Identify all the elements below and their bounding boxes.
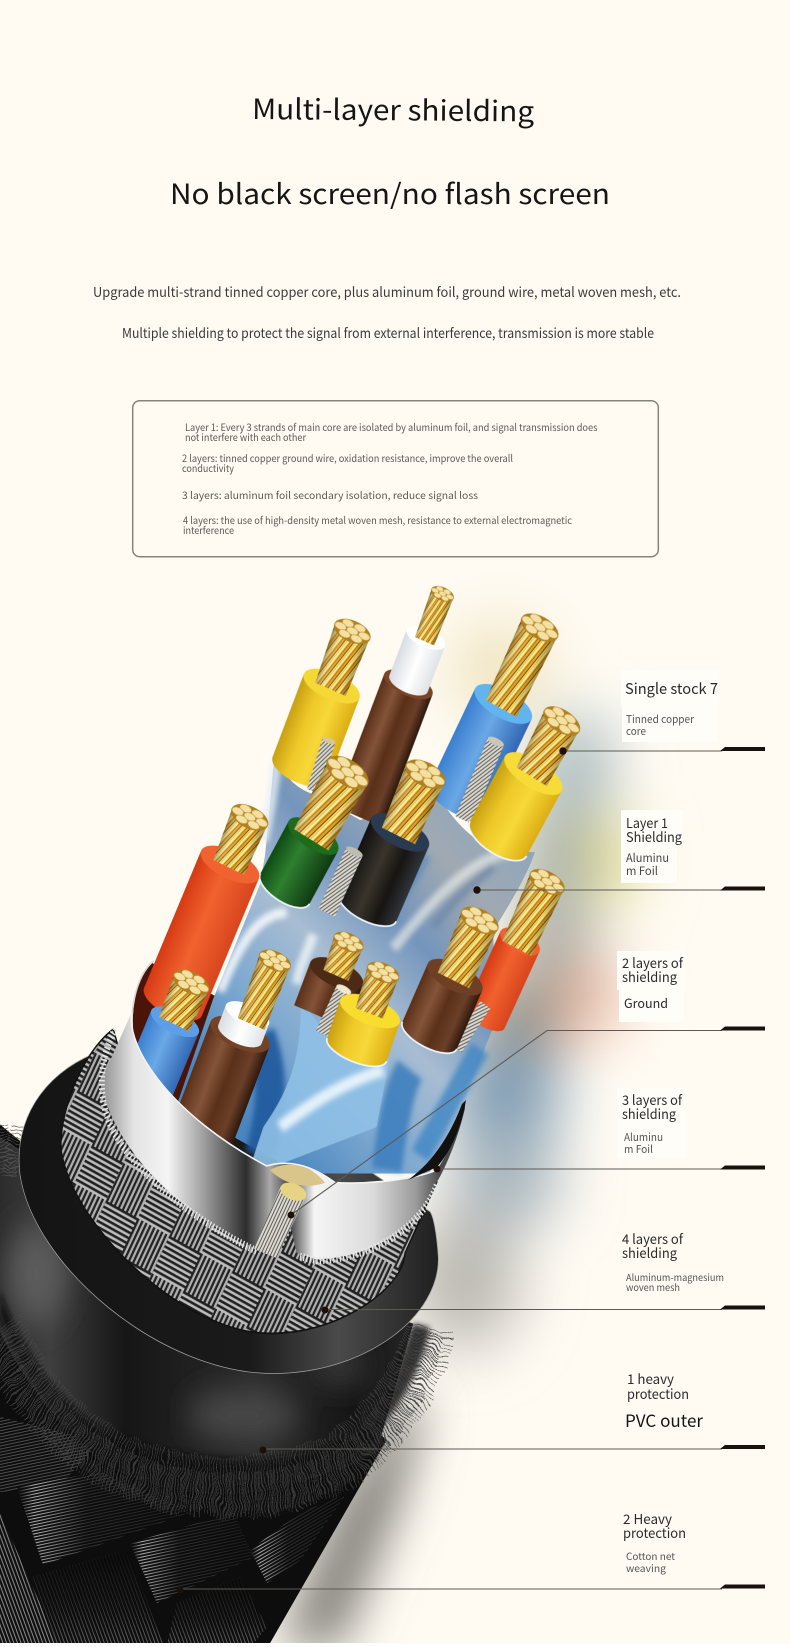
drain strand: back right [455, 735, 505, 824]
panel: layer descriptions: conductivity [182, 460, 235, 475]
base dark fill [0, 1124, 387, 1647]
foil highlights [220, 763, 513, 1170]
wire: brown small [294, 922, 378, 1028]
label: 2 heavy protection: protection [623, 1522, 686, 1542]
intro line 1: Upgrade multi-strand tinned copper core, plus aluminum foil, ground wire, metal woven mesh, etc. [93, 281, 681, 301]
label: 2 layers of shielding: 2 layers of [622, 952, 684, 972]
aluminium foil band [100, 1012, 465, 1259]
label: single stock 7: Single stock 7 [625, 678, 718, 699]
label: 1 heavy protection [625, 1368, 703, 1432]
wire: yellow front right [463, 694, 595, 870]
callout end bars [720, 747, 765, 1588]
panel: layer descriptions: 3 layers: aluminum foil secondary isolation, reduce signal loss [182, 487, 478, 502]
label: 2 heavy protection: Cotton net [626, 1548, 675, 1563]
panel: layer descriptions [133, 401, 658, 557]
woven metal braid [61, 1029, 437, 1333]
opening rim [132, 961, 153, 1049]
label: 1 heavy protection: protection [627, 1383, 689, 1403]
cable edge shadow [280, 1400, 425, 1647]
wire: blue low [119, 961, 219, 1111]
label: single stock 7: core [626, 724, 646, 739]
wire: green [254, 746, 378, 916]
label: 4 layers of shielding: Aluminum-magnesium [626, 1270, 724, 1284]
subtitle: No black screen/no flash screen [170, 173, 610, 213]
label: single stock 7: Tinned copper [626, 712, 695, 727]
drain strand: right group [452, 1001, 490, 1052]
label: layer 1 shielding: m Foil [626, 863, 658, 879]
label: 2 heavy protection: 2 Heavy [623, 1508, 672, 1528]
image bottom strip [0, 1643, 790, 1647]
label: layer 1 shielding: Shielding [626, 826, 682, 846]
panel: layer descriptions: not interfere with each other [185, 429, 306, 444]
wire: yellow small [323, 952, 416, 1073]
fibre fringe [0, 1124, 430, 1494]
label: 4 layers of shielding: 4 layers of [622, 1228, 684, 1248]
gold glint at notch [270, 1165, 325, 1186]
label: 2 layers of shielding [622, 952, 684, 1012]
wire: black [333, 749, 459, 934]
label: 2 layers of shielding: Ground [624, 993, 668, 1012]
intro line 2: Multiple shielding to protect the signal from external interference, transmission is more stable [122, 322, 654, 342]
sheath sheen [7, 1224, 370, 1440]
label: 4 layers of shielding: woven mesh [626, 1280, 680, 1294]
wire: red right [462, 862, 571, 1036]
label: 2 heavy protection: weaving [626, 1560, 666, 1575]
band serrated edge [102, 1029, 437, 1261]
drain strand: small group [316, 982, 352, 1038]
drain strand: back left [307, 736, 336, 794]
panel: layer descriptions: 4 layers: the use of high-density metal woven mesh, resistance to external electromagnetic [183, 512, 572, 527]
wire: red left [139, 793, 283, 1028]
cotton net weave [0, 1417, 345, 1644]
background glow behind cable [410, 620, 638, 1350]
label: 4 layers of shielding [622, 1228, 724, 1294]
label: 1 heavy protection: PVC outer [625, 1407, 703, 1432]
label: 1 heavy protection: 1 heavy [627, 1368, 674, 1388]
dark gap between foil and band [408, 1100, 466, 1180]
wire: blue back right [424, 602, 573, 827]
label: 3 layers of shielding: m Foil [624, 1142, 653, 1157]
label: 2 heavy protection [623, 1508, 686, 1575]
callout leader lines [180, 751, 722, 1589]
label: 3 layers of shielding: 3 layers of [622, 1089, 683, 1109]
ground drain wire [254, 1179, 308, 1258]
label: 3 layers of shielding: shielding [622, 1103, 676, 1123]
panel: layer descriptions: Layer 1: Every 3 strands of main core are isolated by aluminum foil, and signal transmission does [185, 419, 598, 434]
label: 4 layers of shielding: shielding [622, 1242, 677, 1262]
illustration: shielding foil and wire cores [119, 577, 595, 1177]
label: layer 1 shielding: Layer 1 [626, 812, 668, 832]
illustration: fringe and flange [0, 1054, 438, 1494]
callout dots [176, 747, 567, 1594]
label: 2 layers of shielding: shielding [622, 966, 677, 986]
wire: yellow back left [268, 609, 384, 794]
panel: layer descriptions: 2 layers: tinned copper ground wire, oxidation resistance, improve the overall [182, 450, 513, 465]
red-lit opening behind foil [133, 963, 220, 1106]
wire: brown low [168, 937, 301, 1160]
panel: layer descriptions: interference [183, 522, 234, 537]
label: 3 layers of shielding: Aluminu [624, 1130, 663, 1145]
label: single stock 7 [625, 678, 718, 739]
drain strand: middle [319, 844, 364, 917]
black flange ring [19, 1054, 438, 1374]
label panels [617, 670, 719, 1158]
wire: brown back [334, 577, 469, 827]
wire: brown right [397, 897, 511, 1061]
illustration: silver braid and aluminium band [61, 1012, 465, 1333]
black PVC sheath [0, 1137, 413, 1485]
label: 3 layers of shielding [622, 1089, 683, 1157]
foil mass [177, 752, 535, 1173]
foil ribbon: small group [247, 988, 390, 1177]
illustration: cable outer layers (sheath, fringe) [0, 1124, 413, 1647]
title: Multi-layer shielding [252, 88, 534, 130]
ribbon highlight [280, 1070, 383, 1127]
band lip [131, 1012, 437, 1183]
label: layer 1 shielding [626, 812, 682, 879]
label: layer 1 shielding: Aluminu [626, 850, 669, 866]
dark band under fringe [0, 1290, 430, 1494]
